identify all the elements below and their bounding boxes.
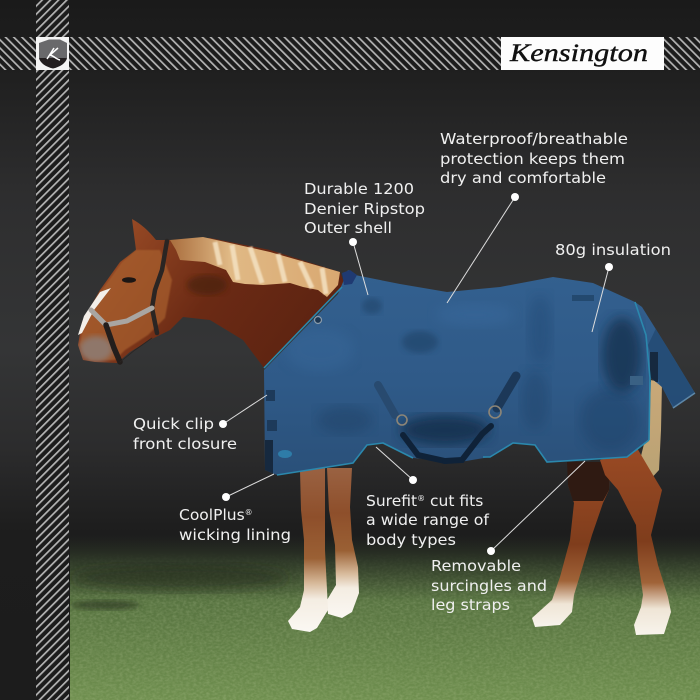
- halter: [91, 241, 167, 362]
- tail: [637, 380, 662, 482]
- callout: waterproof breathable: dry and comfortable: [440, 169, 606, 187]
- callout: wicking lining: ®: [245, 508, 253, 517]
- callout: wicking lining: wicking lining: [179, 526, 291, 544]
- callout: insulation: 80g insulation: [555, 241, 671, 259]
- eye: [122, 277, 136, 283]
- callout: ripstop outer shell: [304, 180, 425, 295]
- striped vertical band: [36, 0, 69, 700]
- callout: wicking lining: CoolPlus: [179, 506, 245, 524]
- callout: surefit cut: [366, 447, 490, 549]
- far hind leg: [532, 462, 610, 627]
- callout: removable surcingles: [431, 461, 585, 614]
- callout: surefit cut: body types: [366, 531, 456, 549]
- surcingle straps: [378, 376, 516, 461]
- dark band on far hind leg: [567, 462, 610, 501]
- callout: front closure: front closure: [133, 435, 237, 453]
- near front leg: [288, 468, 328, 632]
- callout: removable surcingles: Removable: [431, 557, 521, 575]
- callout: waterproof breathable: protection keeps them: [440, 150, 625, 168]
- far front leg: [327, 468, 359, 618]
- callout: wicking lining: [179, 474, 291, 544]
- side tabs: [572, 295, 643, 385]
- callout: removable surcingles: leg straps: [431, 596, 510, 614]
- piping along neck, hem and tail: [264, 287, 695, 475]
- Kensington logo box: [501, 37, 664, 70]
- neck collar patch: [342, 270, 357, 285]
- callout: waterproof breathable: [440, 130, 628, 303]
- callout: surefit cut: cut fits: [425, 492, 483, 510]
- mane: [170, 237, 340, 297]
- callout: waterproof breathable: Waterproof/breathable: [440, 130, 628, 148]
- callout: front closure: Quick clip: [133, 415, 214, 433]
- callout: removable surcingles: surcingles and: [431, 577, 547, 595]
- icon: K shield logo: [36, 37, 69, 70]
- neck and head: [78, 219, 345, 368]
- callout: ripstop outer shell: Denier Ripstop: [304, 200, 425, 218]
- lighter face shading: [80, 250, 172, 360]
- callout: insulation: [555, 241, 671, 332]
- snap ring at neck: [314, 316, 322, 324]
- callout: front closure: [133, 395, 267, 453]
- muzzle grey: [79, 336, 113, 362]
- callout: surefit cut: Surefit: [366, 492, 417, 510]
- white blaze: [78, 288, 111, 335]
- horse: [78, 219, 671, 635]
- grass field: [70, 535, 700, 700]
- front closures: [266, 390, 292, 458]
- Kensington logo box: Kensington: [509, 40, 648, 67]
- blanket: [264, 270, 696, 475]
- callout: surefit cut: ®: [417, 494, 425, 503]
- blanket folds and shadows: [265, 295, 696, 475]
- callout: ripstop outer shell: Durable 1200: [304, 180, 414, 198]
- neck shadow patch: [187, 275, 227, 295]
- callout: surefit cut: a wide range of: [366, 511, 490, 529]
- striped horizontal band: [0, 37, 700, 70]
- near hind leg: [600, 448, 671, 635]
- callout: ripstop outer shell: Outer shell: [304, 219, 392, 237]
